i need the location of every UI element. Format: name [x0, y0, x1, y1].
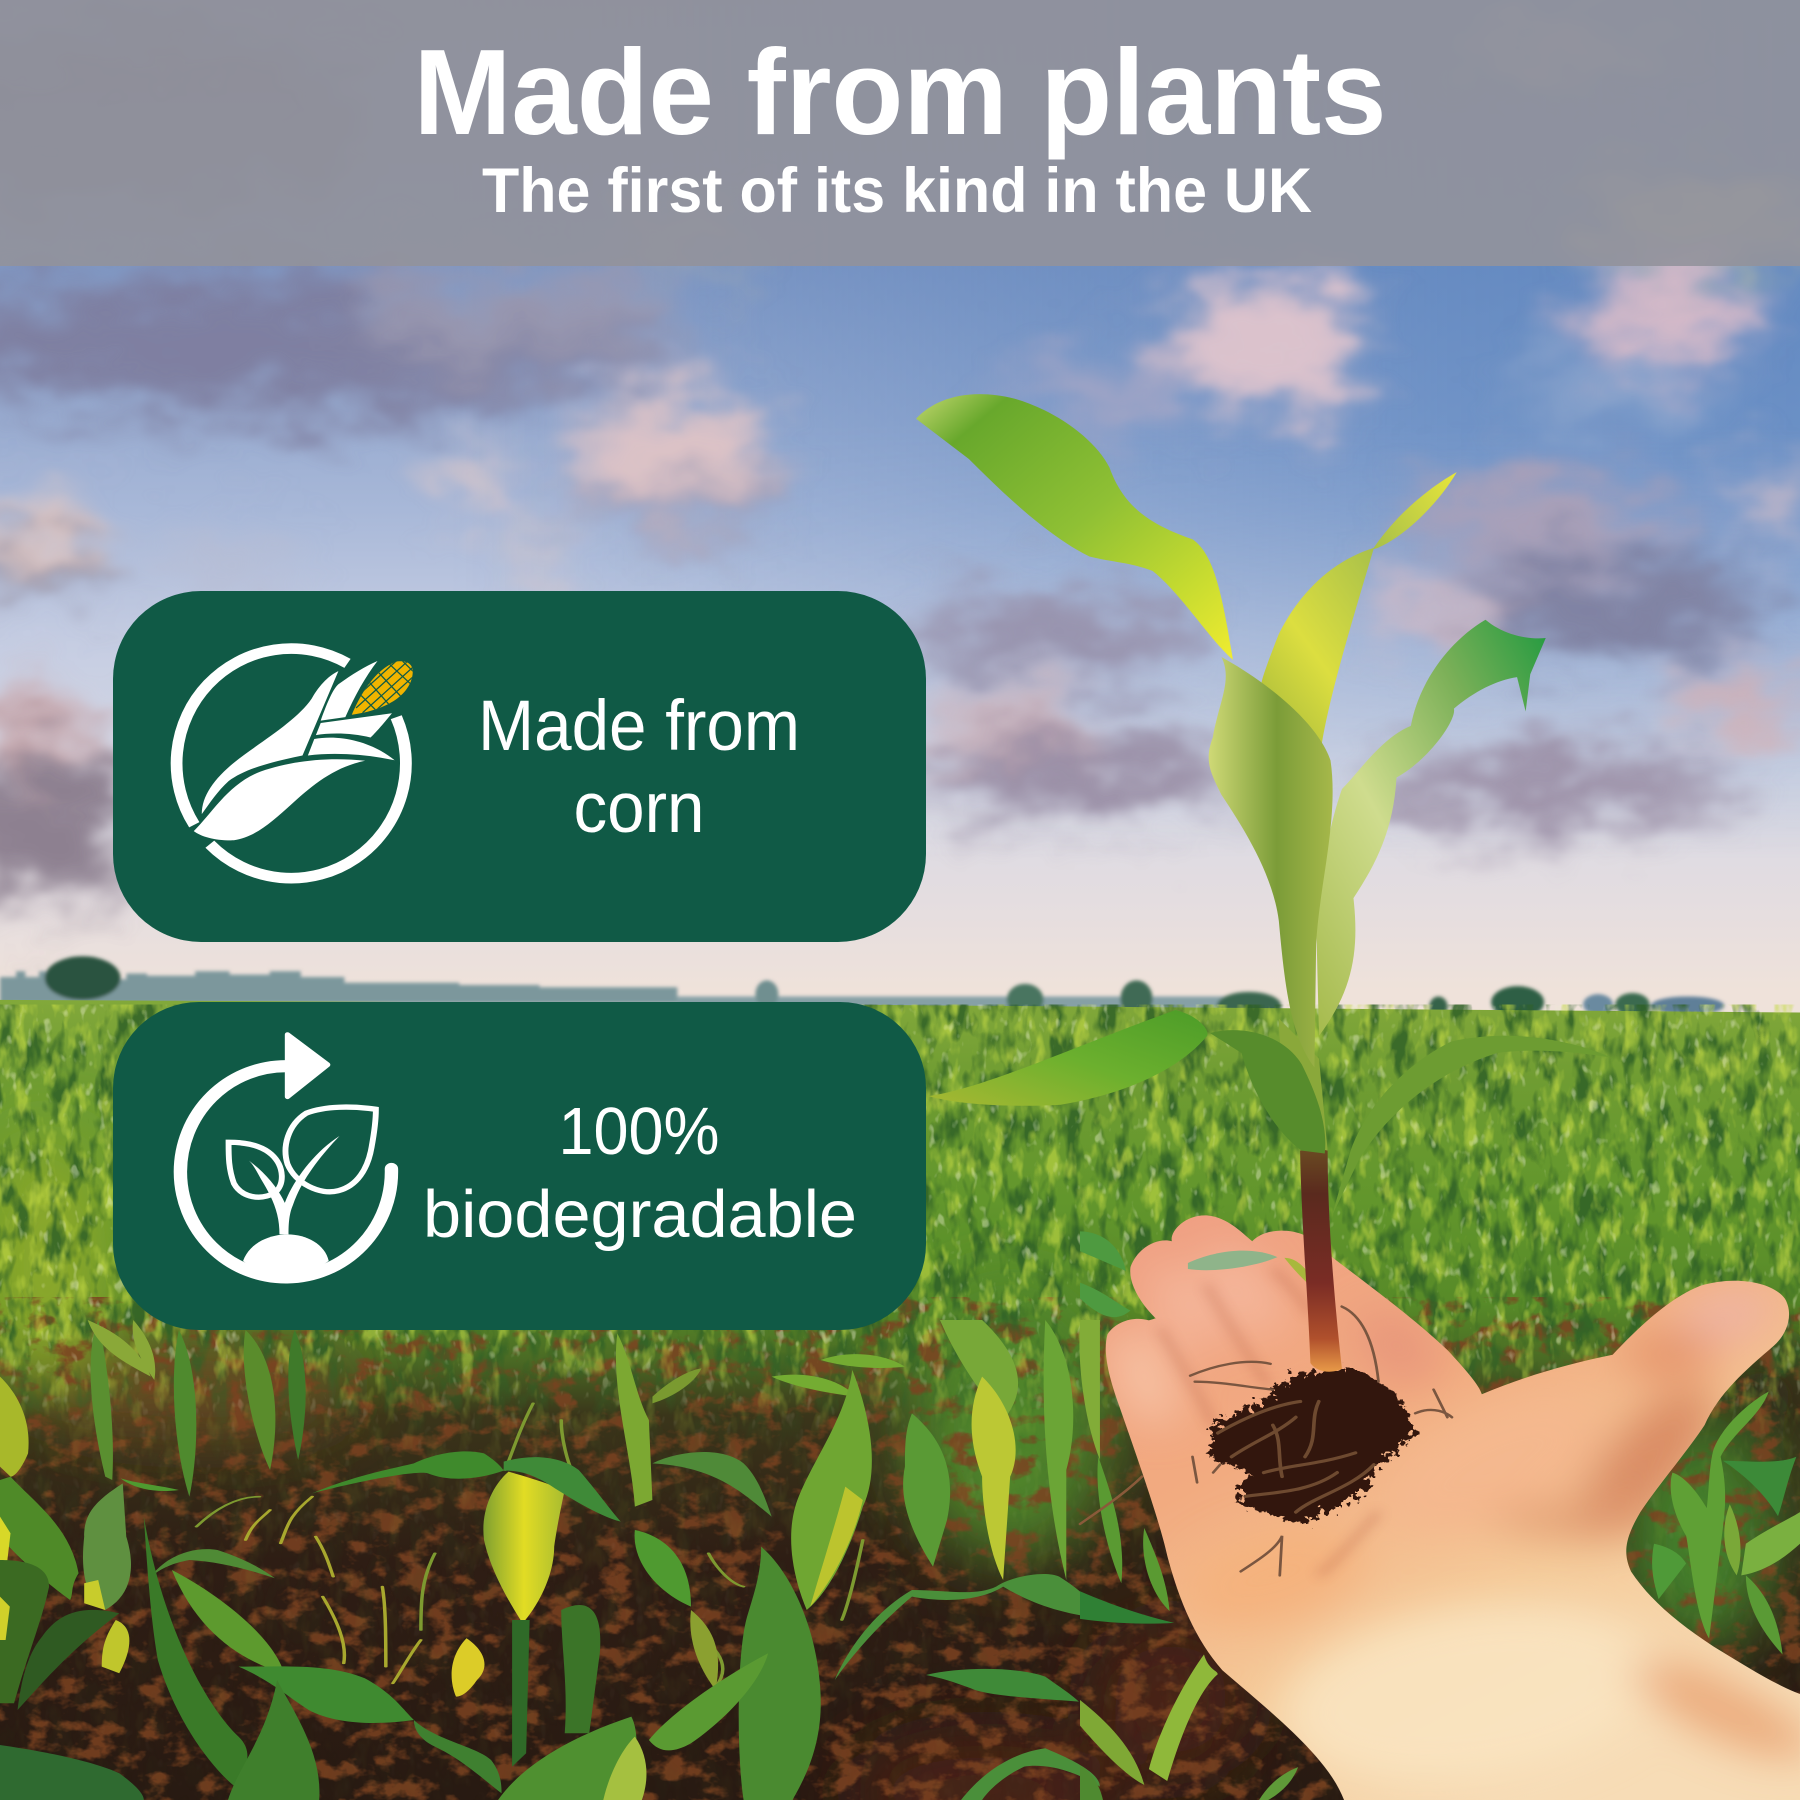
distant tree line [0, 956, 1724, 1019]
text: 100% biodegradable: 100% [558, 1094, 720, 1169]
subtitle: The first of its kind in the UK [482, 156, 1312, 226]
header band [0, 0, 1800, 266]
sky [0, 0, 1800, 1022]
text: 100% biodegradable [423, 1094, 857, 1252]
crop field [0, 1000, 1800, 1800]
icon: corn cob in circle [177, 649, 421, 878]
hand holding the seedling [1080, 1215, 1800, 1800]
panel: biodegradable [113, 1002, 926, 1330]
corn plants around the hand [1080, 1231, 1800, 1800]
central broad leaf [1209, 657, 1333, 1067]
right twisted leaf [1316, 620, 1546, 1036]
stem [1300, 1149, 1342, 1372]
small seed leaf on palm [1188, 1251, 1320, 1293]
text: 100% biodegradable: biodegradable [423, 1177, 857, 1252]
upright yellow leaf [1262, 472, 1457, 743]
lower leaves [929, 1010, 1612, 1217]
title: Made from plants [414, 24, 1386, 160]
text: made from corn [478, 687, 800, 848]
foreground corn plants [0, 1320, 1100, 1800]
text: made from corn: Made from [478, 687, 800, 766]
text: made from corn: corn [574, 769, 704, 848]
icon: seedling with recycling arrow [180, 1035, 391, 1278]
panel: made from corn [113, 591, 926, 942]
root ball of soil [1080, 1307, 1452, 1575]
corn seedling [916, 394, 1612, 1372]
top left leaf [916, 394, 1233, 660]
